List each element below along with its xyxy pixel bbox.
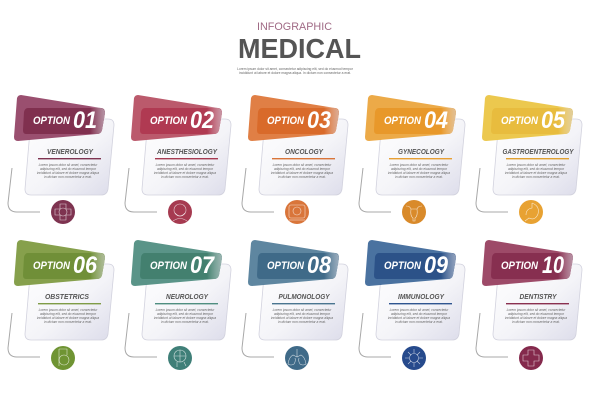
panel: option 09: OPTION [384,260,422,272]
panel: option 06: OBSTETRICS [45,292,89,301]
icon: uterus [402,200,426,224]
title: infographic: INFOGRAPHIC [257,21,332,33]
panel: option 08: 08 [307,252,332,279]
intro text [237,67,354,75]
panel: option 10: incididunt ut labore et dolore magna aliqua [505,316,567,320]
panel: option 04: Lorem ipsum dolor sit amet, consectetur [390,163,449,167]
panel: option 05 [476,95,582,224]
panel: option 07: NEUROLOGY [166,292,209,301]
panel: option 02: OPTION [150,115,188,127]
panel: option 05: incididunt ut labore et dolore magna aliqua [505,171,567,175]
panel: option 04: OPTION [384,115,422,127]
panel: option 05: Lorem ipsum dolor sit amet, consectetur [507,163,566,167]
panel: option 08: in dictum non consectetur a erat. [278,320,326,324]
panel: option 04 [359,95,465,224]
panel: option 01: in dictum non consectetur a erat. [44,175,92,179]
panel: option 02: in dictum non consectetur a erat. [161,175,209,179]
panel: option 06: Lorem ipsum dolor sit amet, consectetur [39,308,98,312]
panel: option 01: adipiscing elit, sed do eiusmod tempor [40,167,97,171]
title: medical: MEDICAL [238,33,361,64]
panel: option 06: incididunt ut labore et dolore magna aliqua [37,316,99,320]
panel: option 01: incididunt ut labore et dolore magna aliqua [37,171,99,175]
panel: option 06: in dictum non consectetur a erat. [44,320,92,324]
panel: option 02: Lorem ipsum dolor sit amet, consectetur [156,163,215,167]
panel: option 07: Lorem ipsum dolor sit amet, consectetur [156,308,215,312]
panel: option 07 [125,240,231,370]
icon: lungs [285,346,309,370]
panel: option 10 [476,240,582,370]
panel: option 01: OPTION [33,115,71,127]
panel: option 03: ONCOLOGY [285,147,324,156]
panel: option 03: adipiscing elit, sed do eiusmod tempor [274,167,331,171]
panel: option 06: OPTION [33,260,71,272]
panel: option 08: OPTION [267,260,305,272]
panel: option 04: in dictum non consectetur a erat. [395,175,443,179]
panel: option 03: incididunt ut labore et dolore magna aliqua [271,171,333,175]
panel: option 03: in dictum non consectetur a erat. [278,175,326,179]
icon: scanner [285,200,309,224]
panel: option 03 [242,95,348,224]
panel: option 05: OPTION [501,115,539,127]
panel: option 07: 07 [190,252,215,279]
icon: dental cross [519,346,543,370]
panel: option 10: adipiscing elit, sed do eiusmod tempor [508,312,565,316]
panel: option 07: OPTION [150,260,188,272]
panel: option 05: GASTROENTEROLOGY [502,147,574,156]
icon: stomach [519,200,543,224]
icon: cross [51,200,75,224]
panel: option 09: adipiscing elit, sed do eiusmod tempor [391,312,448,316]
panel: option 09: in dictum non consectetur a erat. [395,320,443,324]
panel: option 10: DENTISTRY [520,292,557,301]
panel: option 06: 06 [73,252,98,279]
panel: option 01 [8,95,114,224]
panel: option 10: Lorem ipsum dolor sit amet, consectetur [507,308,566,312]
panel: option 09: 09 [424,252,449,279]
panel: option 08: incididunt ut labore et dolore magna aliqua [271,316,333,320]
panel: option 03: Lorem ipsum dolor sit amet, consectetur [273,163,332,167]
panel: option 06: adipiscing elit, sed do eiusmod tempor [40,312,97,316]
panel: option 07: in dictum non consectetur a erat. [161,320,209,324]
icon: pregnancy [51,346,75,370]
panel: option 10: 10 [542,252,565,279]
panel: option 08 [242,240,348,370]
panel: option 03: 03 [307,107,332,134]
panel: option 01: VENEROLOGY [47,147,94,156]
panel: option 09: incididunt ut labore et dolore magna aliqua [388,316,450,320]
panel: option 03: OPTION [267,115,305,127]
panel: option 01: 01 [73,107,97,134]
panel: option 04: GYNECOLOGY [398,147,445,156]
panel: option 08: adipiscing elit, sed do eiusmod tempor [274,312,331,316]
panel: option 02 [125,95,231,224]
icon: virus [402,346,426,370]
icon: mask [168,200,192,224]
panel: option 10: in dictum non consectetur a erat. [512,320,560,324]
panel: option 10: OPTION [501,260,539,272]
intro text: Lorem ipsum dolor sit amet, consectetur adipiscing elit, sed do eiusmod tempor [237,67,354,71]
panel: option 02: adipiscing elit, sed do eiusmod tempor [157,167,214,171]
panel: option 04: adipiscing elit, sed do eiusmod tempor [391,167,448,171]
panel: option 07: incididunt ut labore et dolore magna aliqua [154,316,216,320]
panel: option 04: 04 [424,107,448,134]
panel: option 04: incididunt ut labore et dolore magna aliqua [388,171,450,175]
panel: option 02: 02 [190,107,215,134]
panel: option 01: Lorem ipsum dolor sit amet, consectetur [39,163,98,167]
intro text: incididunt ut labore et dolore magna aliqua. In dictum non consectetur a erat. [239,71,351,75]
panel: option 09: Lorem ipsum dolor sit amet, consectetur [390,308,449,312]
panel: option 02: incididunt ut labore et dolore magna aliqua [154,171,216,175]
panel: option 09 [359,240,465,370]
panel: option 08: Lorem ipsum dolor sit amet, consectetur [273,308,332,312]
panel: option 05: 05 [541,107,566,134]
panel: option 05: in dictum non consectetur a erat. [512,175,560,179]
panel: option 07: adipiscing elit, sed do eiusmod tempor [157,312,214,316]
panel: option 06 [8,240,114,370]
panel: option 05: adipiscing elit, sed do eiusmod tempor [508,167,565,171]
panel: option 09: IMMUNOLOGY [398,292,445,301]
icon: brain head [168,346,192,370]
panel: option 08: PULMONOLOGY [278,292,330,301]
panel: option 02: ANESTHESIOLOGY [156,147,218,156]
